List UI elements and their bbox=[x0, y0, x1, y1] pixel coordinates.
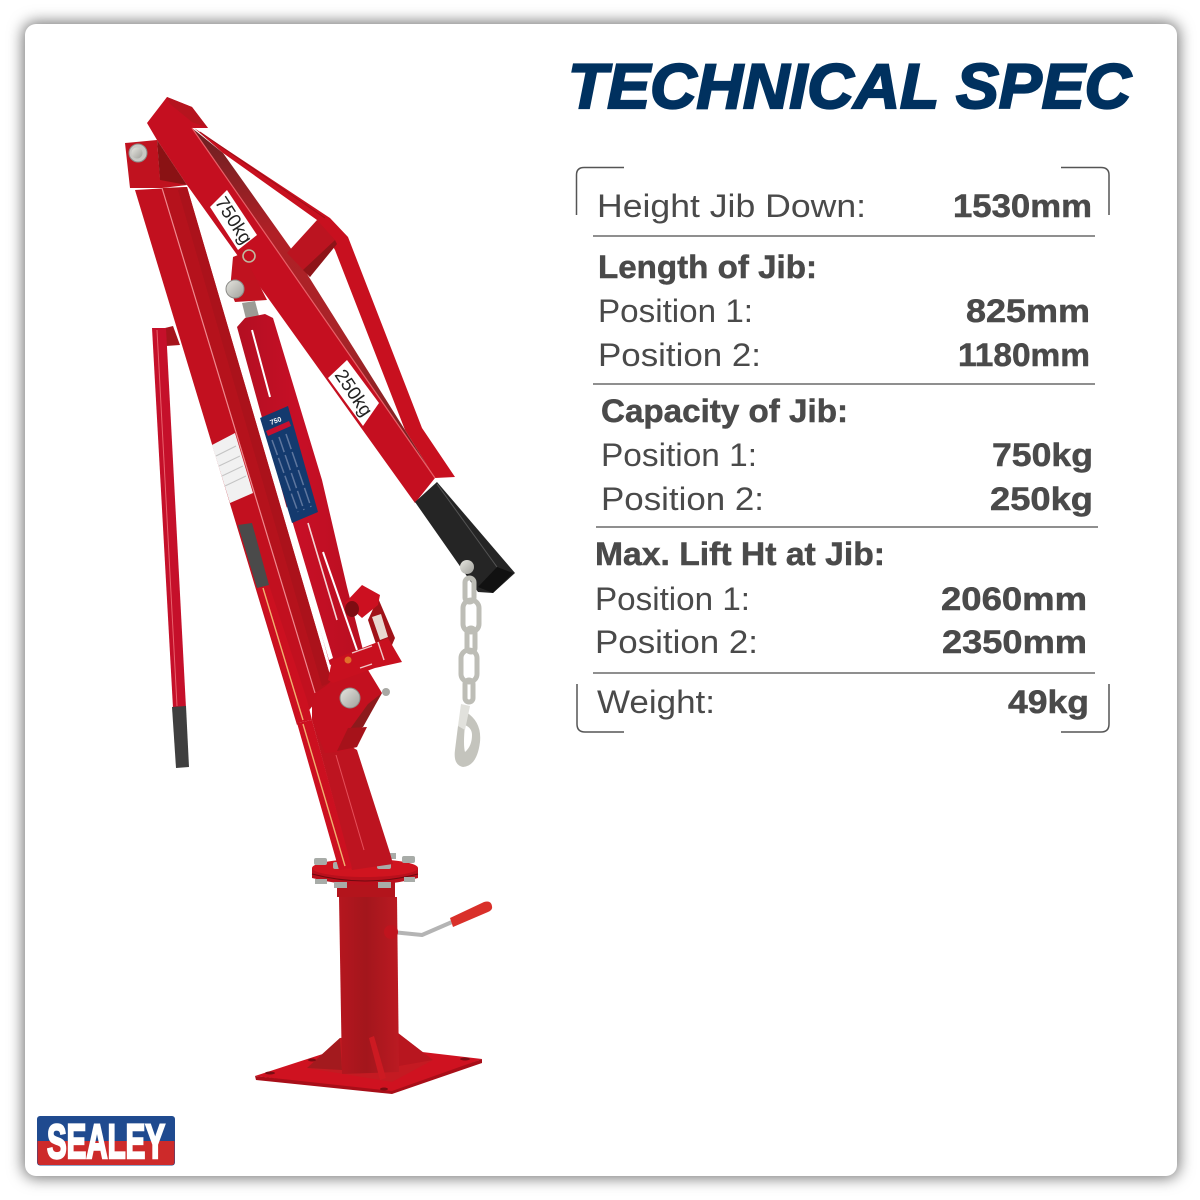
title: TECHNICAL SPEC bbox=[568, 52, 1133, 122]
corner brackets bbox=[576, 168, 1109, 732]
section: max lift height bbox=[595, 536, 1087, 660]
blue instruction label: 750 bbox=[269, 416, 283, 427]
hydraulic pump bbox=[328, 585, 402, 683]
top bolt bbox=[129, 144, 147, 162]
black jib extension bbox=[415, 482, 515, 593]
section: length of jib: Position 2: bbox=[598, 337, 761, 373]
main jib beam bbox=[125, 97, 435, 503]
section: length of jib: 825mm bbox=[966, 293, 1090, 329]
main post bbox=[135, 187, 332, 725]
lever handle bbox=[152, 326, 189, 768]
sealey logo: SEALEY bbox=[47, 1116, 165, 1169]
hydraulic cylinder bbox=[237, 314, 363, 665]
row: weight: 49kg bbox=[1008, 684, 1089, 720]
750kg label: 750kg bbox=[210, 193, 256, 248]
jib truss rear strip bbox=[192, 128, 435, 478]
section: capacity of jib: Position 1: bbox=[601, 437, 757, 473]
section: max lift height: 2350mm bbox=[942, 624, 1087, 660]
lift handle bbox=[384, 902, 492, 939]
section: capacity of jib: Position 2: bbox=[601, 481, 764, 517]
column gusset bbox=[369, 1036, 386, 1080]
section: max lift height: Position 2: bbox=[595, 624, 758, 660]
section: length of jib: Position 1: bbox=[598, 293, 753, 329]
jib truss frame bbox=[194, 128, 455, 478]
gap highlight bbox=[284, 507, 333, 660]
cylinder rod bbox=[242, 301, 259, 319]
row: weight: Weight: bbox=[597, 684, 715, 720]
product image: red folding crane bbox=[125, 97, 515, 1094]
section: capacity of jib: 750kg bbox=[992, 437, 1093, 473]
post grip bbox=[238, 523, 312, 723]
lower mast bbox=[297, 720, 393, 870]
section: length of jib: 1180mm bbox=[958, 337, 1090, 373]
chain bbox=[460, 560, 479, 702]
section: max lift height: Max. Lift Ht at Jib: bbox=[595, 536, 885, 572]
row: height jib down: 1530mm bbox=[953, 188, 1092, 224]
250kg label: 250kg bbox=[330, 366, 376, 421]
row: height jib down bbox=[597, 188, 1092, 224]
section: capacity of jib bbox=[601, 393, 1093, 517]
blue instruction label bbox=[260, 406, 318, 523]
crane base plate bbox=[255, 1033, 482, 1094]
gusset plate bbox=[312, 670, 390, 753]
sealey logo bbox=[37, 1116, 175, 1169]
section: capacity of jib: Capacity of Jib: bbox=[601, 393, 848, 429]
section: capacity of jib: 250kg bbox=[990, 481, 1093, 517]
spec table bbox=[576, 168, 1109, 732]
section: max lift height: 2060mm bbox=[941, 581, 1087, 617]
flange bbox=[312, 853, 418, 897]
row: height jib down: Height Jib Down: bbox=[597, 188, 866, 224]
hook bbox=[455, 704, 480, 767]
section: length of jib: Length of Jib: bbox=[598, 249, 817, 285]
column bbox=[339, 897, 399, 1074]
section: length of jib bbox=[598, 249, 1090, 373]
row: weight bbox=[597, 684, 1089, 720]
section: max lift height: Position 1: bbox=[595, 581, 750, 617]
post data plate bbox=[212, 433, 253, 503]
pivot bracket and bolts bbox=[226, 250, 267, 302]
